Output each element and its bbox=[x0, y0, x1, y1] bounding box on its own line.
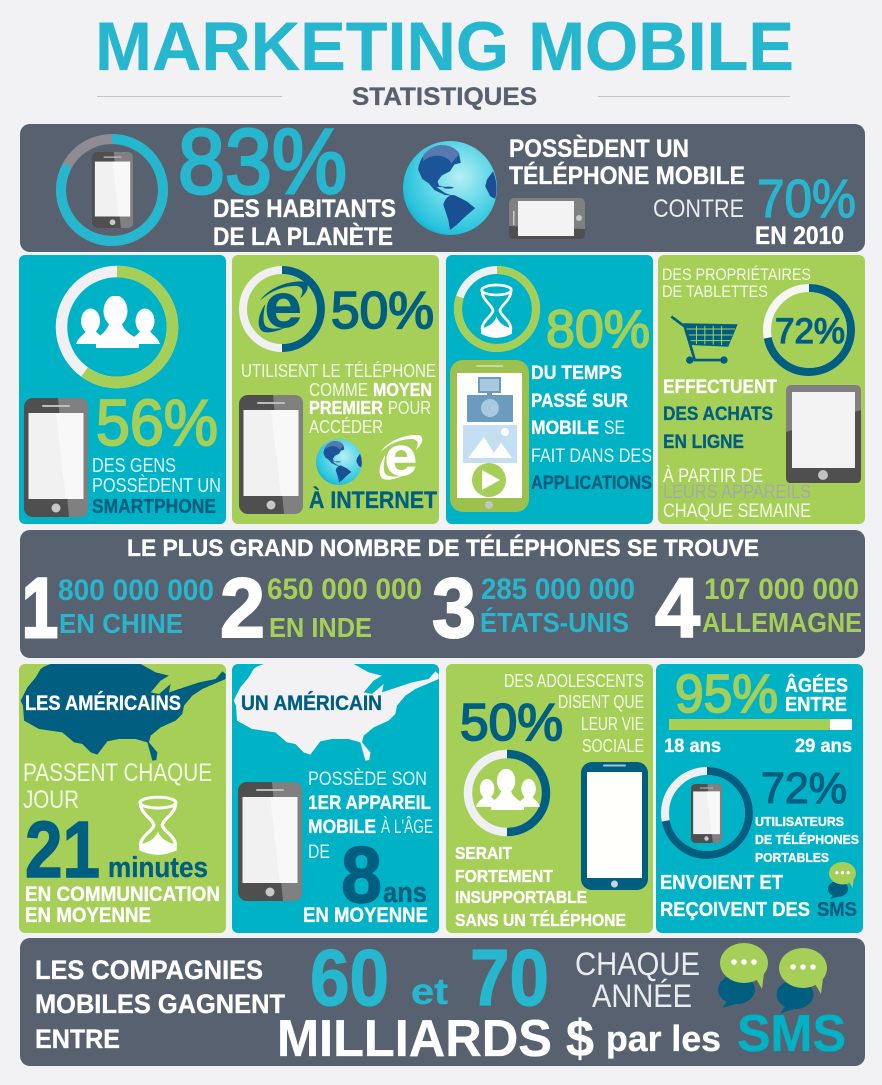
text: âgées entre: ÂGÉES bbox=[785, 673, 848, 697]
text: des habitants de la planète: DE LA PLANÈTE bbox=[213, 222, 393, 251]
text: utilisent le téléphone: UTILISENT LE TÉLÉPHONE bbox=[241, 360, 436, 381]
text: du temps passé sur mobile: FAIT DANS DES bbox=[531, 446, 652, 467]
panel: teens 50% bbox=[446, 664, 653, 933]
panel: 83% of the planet bbox=[20, 111, 865, 252]
text: envoient et reçoivent des sms: REÇOIVENT DES bbox=[660, 898, 810, 921]
rank 3: united states: ÉTATS-UNIS bbox=[480, 607, 629, 638]
text: les compagnies mobiles gagnent entre bbox=[35, 955, 285, 1054]
text: possède son 1er appareil bbox=[308, 769, 433, 863]
rank 2: india: 650 000 000 bbox=[267, 573, 422, 606]
stat: 50%: 50% bbox=[460, 694, 563, 752]
text: des habitants de la planète: DES HABITANTS bbox=[213, 195, 396, 223]
stat: 80%: 80% bbox=[546, 300, 650, 359]
text: du temps passé sur mobile: PASSÉ SUR bbox=[531, 390, 628, 412]
rank 4: germany: 4 bbox=[655, 561, 700, 655]
ring chart: 50% bbox=[243, 270, 321, 348]
rank 1: china: EN CHINE bbox=[59, 608, 183, 639]
rank 3: united states bbox=[432, 561, 635, 655]
text: en communication en moyenne bbox=[25, 883, 220, 927]
text: utilisateurs de téléphones portables: UTILISATEURS bbox=[755, 814, 844, 829]
stat: 56%: 56% bbox=[96, 386, 218, 459]
rank 1: china: 1 bbox=[22, 561, 58, 655]
stat: 83%: 83% bbox=[178, 111, 347, 213]
rank 2: india bbox=[220, 561, 422, 655]
ring chart: 83% bbox=[61, 139, 163, 241]
rank 3: united states: 3 bbox=[432, 561, 476, 655]
icon: globe bbox=[403, 141, 497, 235]
icon: globe bbox=[316, 439, 362, 485]
icon: people bbox=[76, 296, 160, 348]
rank 2: india: 2 bbox=[220, 561, 265, 655]
text: à partir de leurs appareils chaque semaine: CHAQUE SEMAINE bbox=[663, 501, 811, 522]
rank 4: germany: ALLEMAGNE bbox=[702, 607, 862, 638]
ring chart: 72% bbox=[665, 771, 749, 855]
text: utilisent le téléphone: POUR bbox=[388, 397, 431, 418]
stat: 70%: 70% bbox=[757, 169, 856, 229]
text: des gens possèdent un smartphone bbox=[92, 455, 221, 518]
text: effectuent des achats en ligne: EFFECTUENT bbox=[663, 377, 777, 398]
text: effectuent des achats en ligne: EN LIGNE bbox=[663, 432, 744, 453]
text: à partir de leurs appareils chaque semaine bbox=[663, 466, 811, 522]
text: chaque année: CHAQUE bbox=[575, 946, 700, 982]
text: à internet: À INTERNET bbox=[309, 486, 437, 514]
text: utilisent le téléphone: PREMIER bbox=[309, 397, 383, 418]
text: à partir de leurs appareils chaque semaine: LEURS APPAREILS bbox=[663, 482, 811, 503]
icon: internet browser bbox=[259, 281, 308, 332]
text: serait fortement insupportable bbox=[455, 843, 626, 930]
text: milliards $ par les: par les bbox=[606, 1018, 721, 1059]
stat: 60 et 70: 60 bbox=[310, 933, 389, 1022]
text: utilisateurs de téléphones portables: DE TÉLÉPHONES bbox=[755, 832, 859, 847]
icon: shopping cart bbox=[670, 316, 738, 364]
map: usa bbox=[21, 664, 226, 761]
text: serait fortement insupportable: FORTEMENT bbox=[455, 866, 553, 886]
ring chart: 50% bbox=[468, 754, 546, 832]
text: envoient et reçoivent des sms: SMS bbox=[817, 898, 857, 921]
text: des habitants de la planète bbox=[213, 195, 396, 251]
heading: le plus grand nombre: LE PLUS GRAND NOMBRE DE TÉLÉPHONES SE TROUVE bbox=[127, 534, 759, 562]
stat: 8 ans: ans bbox=[383, 877, 427, 909]
text: des adolescents disent que: DES ADOLESCENTS bbox=[504, 671, 644, 691]
text: âgées entre: ENTRE bbox=[785, 694, 847, 716]
icon: tablet bbox=[786, 385, 861, 483]
text: des adolescents disent que: SOCIALE bbox=[582, 736, 644, 756]
text: possèdent un téléphone mobile bbox=[509, 134, 745, 190]
text: passent chaque jour: PASSENT CHAQUE bbox=[23, 759, 212, 787]
text: du temps passé sur mobile: APPLICATIONS bbox=[531, 473, 652, 494]
text: contre: CONTRE bbox=[653, 195, 744, 223]
subtitle: STATISTIQUES bbox=[352, 83, 537, 111]
text: du temps passé sur mobile bbox=[531, 363, 652, 494]
text: effectuent des achats en ligne bbox=[663, 377, 777, 453]
panel: americans 21 minutes bbox=[19, 664, 226, 933]
panel: an american 8 years bbox=[232, 664, 439, 933]
text: des adolescents disent que bbox=[504, 671, 644, 756]
rank 3: united states: 285 000 000 bbox=[481, 573, 635, 606]
panel: 80% applications bbox=[446, 255, 653, 524]
text: milliards $ par les: MILLIARDS $ bbox=[277, 1010, 594, 1068]
panel: 95% aged 18-29 bbox=[656, 664, 863, 933]
stat: 8 ans: 8 bbox=[341, 830, 382, 919]
text: des propriétaires de tablettes: DE TABLETTES bbox=[662, 282, 768, 301]
text: en communication en moyenne: EN MOYENNE bbox=[25, 904, 151, 927]
text: envoient et reçoivent des sms: ENVOIENT ET bbox=[660, 871, 783, 894]
text: passent chaque jour bbox=[23, 759, 212, 814]
text: âgées entre bbox=[785, 673, 848, 716]
text: des adolescents disent que: LEUR VIE bbox=[581, 714, 644, 734]
text: des adolescents disent que: DISENT QUE bbox=[558, 692, 644, 712]
text: passent chaque jour: JOUR bbox=[23, 786, 79, 814]
stat: 60 et 70 bbox=[310, 933, 549, 1022]
text: serait fortement insupportable: SANS UN TÉLÉPHONE bbox=[455, 909, 626, 930]
stat: 72%: 72% bbox=[761, 764, 847, 813]
ring chart: 56% bbox=[62, 272, 172, 382]
text: des propriétaires de tablettes: DES PROPRIÉTAIRES bbox=[662, 265, 811, 284]
stat: 21 minutes: 21 bbox=[25, 805, 100, 894]
rank 4: germany bbox=[655, 561, 862, 655]
text: les américains: LES AMÉRICAINS bbox=[25, 692, 181, 715]
text: en moyenne: EN MOYENNE bbox=[303, 904, 428, 927]
icon: browser white bbox=[380, 435, 422, 480]
text: du temps passé sur mobile: DU TEMPS bbox=[531, 363, 622, 384]
panel: 56% smartphone bbox=[19, 255, 226, 524]
title: MARKETING MOBILE bbox=[95, 8, 794, 85]
ring chart: 80% bbox=[458, 270, 536, 348]
icon: speech bubbles bbox=[718, 943, 827, 1013]
icon: phone bbox=[581, 762, 648, 890]
icon: phone bbox=[691, 784, 722, 843]
icon: phone bbox=[24, 398, 88, 517]
text: possède son 1er appareil: À L'ÂGE bbox=[381, 816, 433, 838]
text: possède son 1er appareil: POSSÈDE SON bbox=[308, 769, 427, 790]
icon: phone with apps bbox=[450, 360, 529, 512]
text: un américain: UN AMÉRICAIN bbox=[241, 692, 382, 715]
stat: 60 et 70: 70 bbox=[470, 933, 549, 1022]
text: en communication en moyenne: EN COMMUNICATION bbox=[25, 883, 220, 906]
icon: phone bbox=[92, 152, 133, 228]
text: serait fortement insupportable: SERAIT bbox=[455, 843, 512, 863]
text: du temps passé sur mobile: MOBILE bbox=[531, 418, 599, 439]
stat: 21 minutes bbox=[25, 805, 208, 894]
text: en 2010: EN 2010 bbox=[755, 222, 844, 250]
icon: hourglass bbox=[139, 797, 177, 855]
text: possèdent un téléphone mobile: TÉLÉPHONE MOBILE bbox=[509, 161, 745, 190]
text: des gens possèdent un smartphone: POSSÈDENT UN bbox=[92, 474, 221, 497]
text: envoient et reçoivent des sms bbox=[660, 871, 857, 921]
text: utilisent le téléphone: ACCÉDER bbox=[309, 416, 383, 437]
bar chart: 95% bbox=[669, 719, 852, 730]
icon: landscape phone bbox=[509, 198, 585, 239]
stat: 21 minutes: minutes bbox=[108, 852, 208, 884]
stat: 50%: 50% bbox=[331, 282, 434, 340]
text: à partir de leurs appareils chaque semaine: À PARTIR DE bbox=[663, 466, 763, 487]
text: des gens possèdent un smartphone: SMARTPHONE bbox=[92, 496, 216, 518]
rank 1: china bbox=[22, 561, 214, 655]
text: du temps passé sur mobile: SE bbox=[604, 418, 625, 439]
text: chaque année bbox=[575, 946, 700, 1014]
labels: age range: 18 ans bbox=[664, 736, 721, 757]
text: possèdent un téléphone mobile: POSSÈDENT UN bbox=[509, 134, 689, 163]
panel: 50% internet bbox=[232, 255, 439, 524]
stat: 8 ans bbox=[341, 830, 427, 919]
panel: 72% tablet owners bbox=[658, 255, 865, 524]
text: les compagnies mobiles gagnent entre: ENTRE bbox=[35, 1024, 120, 1054]
text: sms: SMS bbox=[737, 1005, 846, 1063]
text: utilisent le téléphone: COMME bbox=[309, 379, 368, 400]
text: utilisateurs de téléphones portables bbox=[755, 814, 859, 865]
text: les compagnies mobiles gagnent entre: LES COMPAGNIES bbox=[35, 955, 263, 985]
icon: people bbox=[476, 769, 540, 810]
icon: phone bbox=[239, 395, 303, 514]
text: des gens possèdent un smartphone: DES GENS bbox=[92, 455, 176, 477]
rank 2: india: EN INDE bbox=[269, 612, 372, 643]
icon: sms bubbles bbox=[828, 862, 856, 899]
text: les compagnies mobiles gagnent entre: MOBILES GAGNENT bbox=[35, 989, 285, 1019]
rank 4: germany: 107 000 000 bbox=[704, 573, 859, 606]
text: possède son 1er appareil: DE bbox=[308, 842, 330, 863]
stat: 60 et 70: et bbox=[411, 971, 448, 1012]
text: serait fortement insupportable: INSUPPORTABLE bbox=[455, 887, 587, 907]
text: des propriétaires de tablettes bbox=[662, 265, 811, 301]
text: utilisent le téléphone: MOYEN bbox=[373, 379, 432, 400]
stat: 95%: 95% bbox=[675, 664, 778, 724]
labels: age range bbox=[664, 736, 852, 757]
rank 1: china: 800 000 000 bbox=[58, 574, 214, 607]
stat: 72%: 72% bbox=[775, 312, 845, 351]
text: utilisent le téléphone bbox=[241, 360, 436, 437]
labels: age range: 29 ans bbox=[795, 736, 852, 757]
text: utilisateurs de téléphones portables: PORTABLES bbox=[755, 850, 829, 865]
text: possède son 1er appareil: 1ER APPAREIL bbox=[308, 793, 431, 814]
text: chaque année: ANNÉE bbox=[592, 978, 692, 1014]
ring chart: 72% bbox=[767, 288, 851, 372]
map: usa bbox=[234, 664, 439, 761]
icon: phone bbox=[238, 782, 302, 901]
text: effectuent des achats en ligne: DES ACHATS bbox=[663, 404, 773, 425]
panel: companies earnings bbox=[20, 933, 865, 1068]
text: possède son 1er appareil: MOBILE bbox=[308, 817, 376, 838]
panel: largest number of phones ranking bbox=[20, 530, 865, 658]
icon: hourglass bbox=[481, 285, 512, 338]
